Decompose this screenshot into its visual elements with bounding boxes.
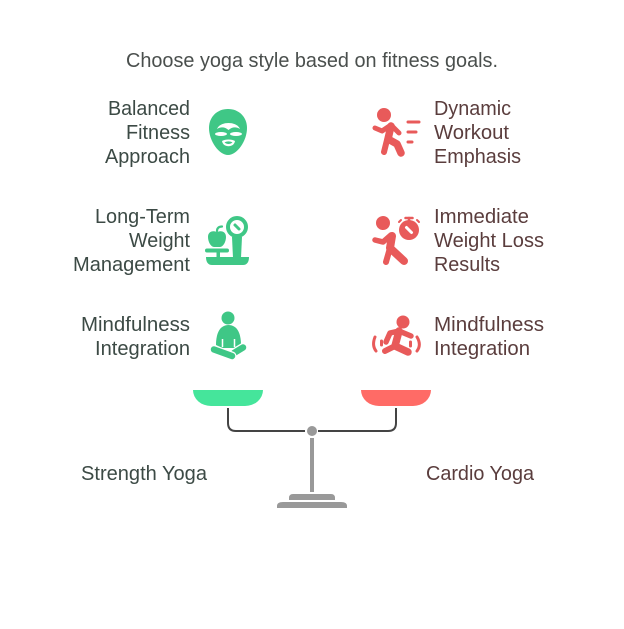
right label: Immediate Weight Loss Results: Weight Loss [434,230,544,252]
icon: apple on weighing scale [205,218,249,265]
left pan [193,390,263,406]
right label: Immediate Weight Loss Results: Immediate [434,206,529,228]
title: Choose yoga style based on fitness goals. [126,50,498,72]
icon: face mask [209,109,247,155]
icon: runner with stopwatch [375,216,419,262]
pivot [307,426,317,436]
label: Cardio Yoga: Cardio Yoga [426,463,535,485]
left label: Balanced Fitness Approach: Approach [105,146,190,168]
label: Strength Yoga: Strength Yoga [81,463,208,485]
left label: Mindfulness Integration: Mindfulness [81,314,190,336]
right label: Mindfulness Integration: Mindfulness [434,314,544,336]
icon: runner with speed lines [375,108,419,153]
icon: runner with motion waves [374,316,419,352]
right label: Dynamic Workout Emphasis [434,98,521,168]
left label: Long-Term Weight Management [73,206,190,276]
left label: Mindfulness Integration: Integration [95,338,190,360]
right label: Dynamic Workout Emphasis: Dynamic [434,98,511,120]
left label: Balanced Fitness Approach: Balanced [108,98,190,120]
right label: Dynamic Workout Emphasis: Workout [434,122,509,144]
right label: Mindfulness Integration [434,314,544,360]
right label: Dynamic Workout Emphasis: Emphasis [434,146,521,168]
right label: Immediate Weight Loss Results: Results [434,254,500,276]
beam [228,408,396,431]
left label: Long-Term Weight Management: Management [73,254,190,276]
left label: Balanced Fitness Approach: Fitness [126,122,190,144]
right label: Immediate Weight Loss Results [434,206,544,276]
left label: Balanced Fitness Approach [105,98,190,168]
left label: Long-Term Weight Management: Weight [129,230,190,252]
base [277,494,347,508]
right label: Mindfulness Integration: Integration [434,338,530,360]
left label: Long-Term Weight Management: Long-Term [95,206,190,228]
icon: meditating person [214,312,243,356]
stem [310,438,314,492]
balance scale [193,390,431,508]
left label: Mindfulness Integration [81,314,190,360]
right pan [361,390,431,406]
